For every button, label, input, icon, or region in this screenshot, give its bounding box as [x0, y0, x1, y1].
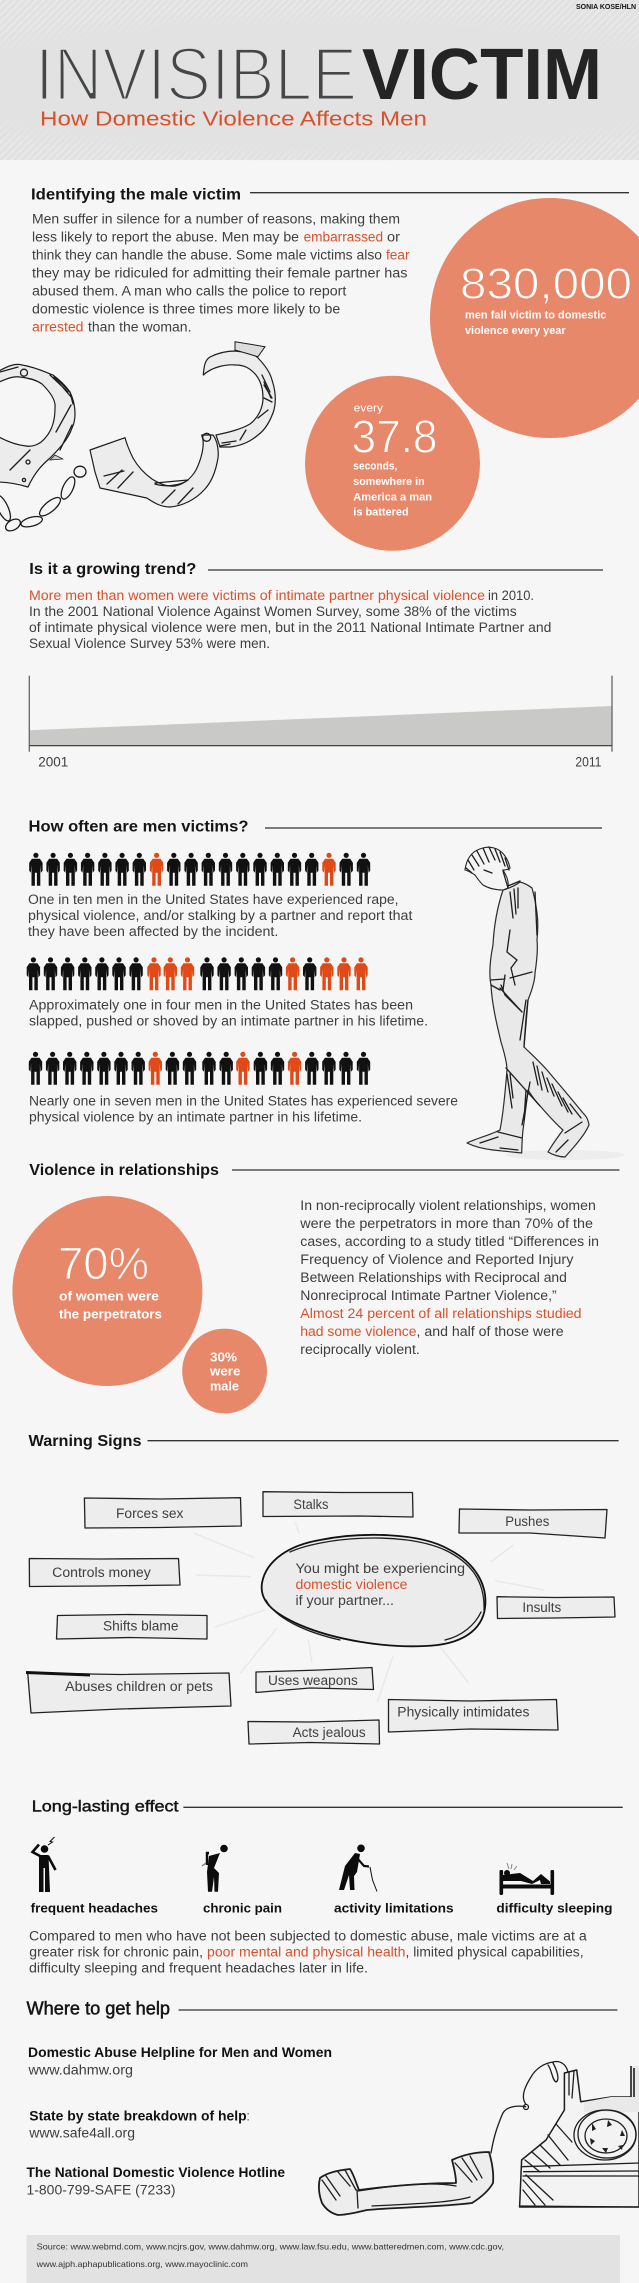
body text: Compared to men who have not been subjected to domestic abuse, male victims are at a [29, 1929, 587, 1944]
sign: controls money: Controls money [52, 1565, 151, 1580]
sign: shifts blame [56, 1614, 207, 1639]
helpline three [26, 2164, 285, 2197]
body text [299, 1198, 599, 1357]
heading: Long-lasting effect [32, 1799, 179, 1816]
stat circle: 830,000: violence every year [465, 325, 566, 337]
center bubble: You might be experiencing [296, 1561, 465, 1576]
icon labels: difficulty sleeping [496, 1901, 613, 1916]
sign: acts jealous [248, 1720, 380, 1744]
area chart 2001 to 2011: 2011 [575, 755, 601, 770]
section: identifying the male victim [0, 186, 639, 551]
icon labels: frequent headaches [31, 1901, 158, 1916]
icon: chronic pain [202, 1845, 228, 1892]
sign: shifts blame: Shifts blame [103, 1619, 178, 1634]
stat circle: 37.8 seconds: 37.8 [352, 411, 438, 463]
body text: of intimate physical violence were men, but in the 2011 National Intimate Partner and [29, 620, 551, 635]
stat circle: 37.8 seconds: America a man [353, 491, 432, 503]
body text: less likely to report the abuse. Men may be [32, 229, 299, 244]
helpline two [28, 2107, 250, 2141]
body text: they may be ridiculed for admitting their female partner has [32, 265, 408, 280]
heading: Where to get help [26, 1998, 170, 2018]
helpline one: Domestic Abuse Helpline for Men and Women [28, 2044, 332, 2060]
center bubble: domestic violence [296, 1577, 408, 1592]
body text: Sexual Violence Survey 53% were men. [29, 636, 270, 651]
sign: physically intimidates: Physically intimidates [397, 1705, 530, 1720]
body text: arrested [32, 319, 84, 334]
body text: More men than women were victims of intimate partner physical violence [29, 588, 485, 603]
heading: Warning Signs [28, 1433, 142, 1450]
area chart 2001 to 2011: 2001 [38, 755, 68, 770]
subtitle: How Domestic Violence Affects Men [40, 108, 427, 130]
text: one in four [29, 997, 428, 1028]
body text: embarrassed [304, 229, 383, 244]
body text: Frequency of Violence and Reported Injury [300, 1252, 574, 1267]
text: one in four: Approximately one in four men in the United States has been [29, 997, 413, 1012]
sign: insults [497, 1597, 615, 1618]
section: where to get help [26, 1998, 639, 2215]
area chart 2001 to 2011 [29, 676, 612, 770]
body text: difficulty sleeping and frequent headaches later in life. [29, 1961, 368, 1976]
helpline two: State by state breakdown of help [29, 2107, 247, 2123]
section: violence in relationships [12, 1162, 619, 1413]
body text: cases, according to a study titled “Differences in [300, 1234, 599, 1249]
stat circle: 37.8 seconds: is battered [353, 507, 409, 519]
sign: stalks: Stalks [293, 1497, 329, 1512]
body text: than the woman. [88, 319, 192, 334]
stat circle: 70%: the perpetrators [59, 1308, 162, 1322]
pictogram row: one in ten [29, 853, 370, 886]
section: how often are men victims [27, 819, 625, 1160]
body text [29, 1929, 587, 1976]
body text: or [387, 229, 401, 244]
illustration: man walking with head down [465, 847, 625, 1160]
body text: In the 2001 National Violence Against Women Survey, some 38% of the victims [29, 604, 517, 619]
stat circle: 37.8 seconds: seconds, [353, 460, 397, 472]
sources panel: Source: www.webmd.com, www.ncjrs.gov, www.dahmw.org, www.law.fsu.edu, www.batteredmen.com, www.cdc.gov, [37, 2242, 504, 2252]
heading: Is it a growing trend? [29, 561, 196, 578]
helpline three: The National Domestic Violence Hotline [26, 2164, 285, 2180]
sign: uses weapons [256, 1668, 374, 1692]
text: one in ten: One in ten men in the United States have experienced rape, [28, 892, 398, 907]
sign: acts jealous: Acts jealous [293, 1725, 366, 1740]
helpline three: 1-800-799-SAFE (7233) [26, 2182, 176, 2197]
stat circle: 830,000: 830,000 [460, 259, 632, 308]
sources panel [26, 2235, 620, 2283]
sign: stalks [263, 1492, 413, 1517]
body text: Men suffer in silence for a number of reasons, making them [32, 211, 400, 226]
section: is it a growing trend [29, 561, 612, 770]
body text [32, 211, 410, 334]
body text: reciprocally violent. [300, 1342, 420, 1357]
body text: in 2010. [488, 588, 534, 603]
stat circle: 30% [182, 1329, 267, 1413]
pictogram row: one in four [27, 957, 368, 990]
text: one in ten: they have been affected by the incident. [28, 924, 278, 939]
sign: forces sex [84, 1498, 241, 1528]
header banner [0, 0, 639, 163]
stat circle: 830,000 [430, 198, 639, 438]
stat circle: 37.8 seconds [305, 376, 480, 551]
text: one in seven: physical violence by an intimate partner in his lifetime. [29, 1109, 362, 1124]
sign: abuses children or pets [26, 1672, 231, 1713]
icon labels [31, 1901, 613, 1916]
stat circle: 70% [12, 1196, 202, 1386]
body text: Almost 24 percent of all relationships studied [300, 1306, 582, 1321]
title: INVISIBLE [35, 32, 357, 116]
helpline one [27, 2044, 332, 2077]
stat circle: 37.8 seconds: every [354, 402, 384, 414]
text: one in seven [29, 1093, 458, 1124]
body text: greater risk for chronic pain, [29, 1945, 203, 1960]
body text: poor mental and physical health [207, 1945, 406, 1960]
icon: difficulty sleeping [500, 1863, 554, 1895]
helpline two: : [247, 2108, 250, 2123]
heading: How often are men victims? [28, 819, 249, 836]
stat circle: 70%: 70% [58, 1238, 149, 1289]
section: warning signs [26, 1433, 619, 1744]
body text: were the perpetrators in more than 70% of the [299, 1216, 593, 1231]
center bubble [262, 1535, 485, 1646]
icon labels: activity limitations [334, 1901, 454, 1916]
body text: domestic violence is three times more likely to be [32, 301, 340, 316]
body text [29, 588, 551, 651]
sign: uses weapons: Uses weapons [268, 1673, 358, 1688]
text: one in ten: physical violence, and/or stalking by a partner and report that [28, 908, 413, 923]
heading: Violence in relationships [29, 1162, 219, 1179]
sign: physically intimidates [388, 1700, 558, 1732]
stat circle: 70%: of women were [59, 1290, 159, 1304]
body text: fear [386, 247, 410, 262]
text: one in seven: Nearly one in seven men in the United States has experienced severe [29, 1093, 458, 1108]
section: long-lasting effect [29, 1799, 623, 1976]
text: one in ten [28, 892, 413, 939]
body text: , limited physical capabilities, [406, 1945, 584, 1960]
icon: activity limitations [339, 1844, 377, 1892]
body text: Nonreciprocal Intimate Partner Violence,” [300, 1288, 557, 1303]
icon labels: chronic pain [203, 1901, 282, 1916]
sign: abuses children or pets: Abuses children or pets [65, 1679, 213, 1694]
stat circle: 30%: were [209, 1365, 240, 1379]
illustration: handcuffs [0, 342, 275, 533]
illustration: telephone [319, 2061, 639, 2215]
helpline one: www.dahmw.org [27, 2062, 133, 2077]
title [35, 32, 602, 116]
heading: Identifying the male victim [31, 186, 241, 203]
helpline two: www.safe4all.org [28, 2126, 135, 2141]
icon: frequent headaches [32, 1837, 56, 1892]
sign: controls money [29, 1558, 180, 1586]
body text: Between Relationships with Reciprocal and [300, 1270, 567, 1285]
sign: pushes: Pushes [505, 1514, 550, 1529]
sources panel: www.ajph.aphapublications.org, www.mayoclinic.com [36, 2259, 248, 2269]
text: one in four: slapped, pushed or shoved by an intimate partner in his lifetime. [29, 1013, 428, 1028]
body text: abused them. A man who calls the police to report [32, 283, 347, 298]
pictogram row: one in seven [29, 1052, 370, 1085]
body text: In non-reciprocally violent relationships, women [300, 1198, 596, 1213]
photo credit: SONIA KOSE/HLN [576, 4, 636, 11]
body text: , and half of those were [416, 1324, 564, 1339]
center bubble: if your partner... [296, 1593, 394, 1608]
sign: insults: Insults [522, 1600, 561, 1615]
stat circle: 830,000: men fall victim to domestic [465, 310, 606, 322]
body text: had some violence [300, 1324, 416, 1339]
body text: think they can handle the abuse. Some male victims also [32, 247, 382, 262]
title: VICTIM [362, 35, 602, 115]
sign: pushes [459, 1509, 607, 1538]
stat circle: 30%: male [210, 1379, 239, 1393]
sign: forces sex: Forces sex [116, 1506, 184, 1521]
stat circle: 30%: 30% [210, 1350, 237, 1364]
stat circle: 37.8 seconds: somewhere in [353, 476, 425, 488]
